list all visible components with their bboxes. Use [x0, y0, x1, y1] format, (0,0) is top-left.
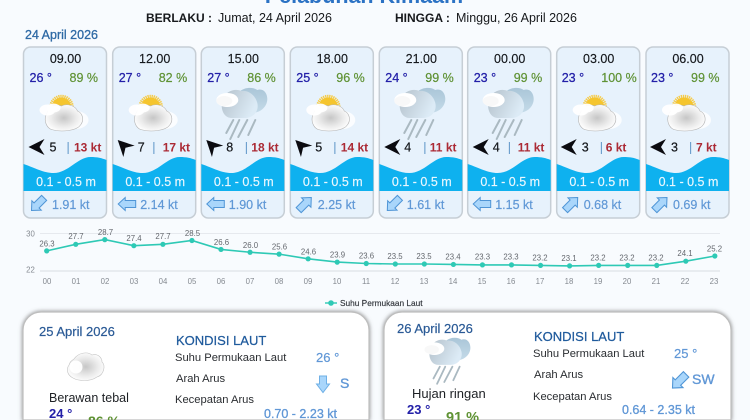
panel: forecast 09.00: 13 kt [74, 140, 101, 154]
panel: forecast 03.00: 3 [582, 140, 589, 154]
line chart: sea surface temperature: 26.6 [214, 238, 229, 247]
panel: forecast 03.00: 23 ° [562, 71, 584, 85]
panel: forecast 06.00: | [689, 140, 692, 154]
panel: forecast 09.00: 26 ° [30, 71, 52, 85]
line chart: sea surface temperature: 15 [478, 277, 487, 286]
panel: forecast 12.00: 27 ° [119, 71, 141, 85]
panel: forecast 00.00: 99 % [514, 71, 542, 85]
line chart: sea surface temperature: 02 [101, 277, 109, 286]
date heading: 24 April 2026 [25, 28, 98, 42]
panel: forecast 21.00 [379, 47, 462, 218]
panel: forecast 12.00 [112, 47, 196, 218]
panel: 26 April: 25 ° [674, 346, 697, 361]
panel: forecast 12.00: 17 kt [163, 140, 190, 154]
line chart: sea surface temperature: 25.2 [707, 244, 722, 254]
panel: forecast 18.00: 96 % [336, 71, 365, 85]
panel: forecast 06.00: 3 [671, 140, 678, 154]
line chart: sea surface temperature: 07 [246, 277, 254, 286]
line chart: sea surface temperature: 18 [565, 277, 573, 286]
line chart: sea surface temperature: 01 [72, 277, 80, 286]
line chart: sea surface temperature: 23.5 [387, 252, 403, 261]
line chart: sea surface temperature: 30 [26, 230, 35, 238]
chart legend: Suhu Permukaan Laut [340, 298, 423, 308]
panel: forecast 21.00: 4 [404, 140, 411, 154]
panel: forecast 18.00: 18.00 [317, 52, 348, 66]
line chart: sea surface temperature: 04 [159, 277, 168, 286]
line chart: sea surface temperature: 17 [536, 277, 544, 286]
panel: forecast 03.00: 6 kt [606, 140, 626, 154]
panel: forecast 15.00: 8 [226, 140, 233, 154]
panel: forecast 15.00: 1.90 kt [229, 198, 267, 212]
panel: forecast 12.00: 7 [138, 140, 145, 154]
panel: forecast 15.00: 15.00 [228, 52, 259, 66]
validity period [146, 11, 577, 25]
line chart: sea surface temperature: 27.7 [155, 232, 171, 241]
line chart: sea surface temperature: 23.4 [445, 252, 461, 262]
validity period: HINGGA : [395, 11, 450, 25]
line chart: sea surface temperature: 23.2 [648, 254, 664, 262]
panel: 26 April: 0.64 - 2.35 kt [622, 403, 695, 417]
panel: forecast 03.00: 0.1 - 0.5 m [569, 175, 629, 189]
panel: forecast 09.00: | [66, 140, 70, 154]
line chart: sea surface temperature: 27.4 [126, 234, 142, 243]
panel: 26 April: Kecepatan Arus [533, 391, 612, 403]
line chart: sea surface temperature: 23.2 [590, 254, 606, 262]
icon: light rain [424, 338, 470, 384]
line chart: sea surface temperature: 00 [43, 277, 52, 286]
line chart: sea surface temperature: 23.1 [561, 254, 577, 263]
panel: forecast 06.00: 99 % [691, 71, 720, 85]
line chart: sea surface temperature: 22 [26, 266, 35, 274]
icon: current arrow south-west [667, 369, 691, 393]
panel: forecast 12.00: 2.14 kt [140, 198, 178, 212]
line chart: sea surface temperature: 23.5 [416, 252, 432, 261]
panel: forecast 00.00: 1.15 kt [495, 198, 533, 212]
panel: 26 April [384, 312, 731, 420]
line chart: sea surface temperature: 19 [594, 277, 602, 286]
panel: forecast 03.00 [557, 47, 640, 218]
line chart: sea surface temperature: 22 [681, 277, 689, 286]
panel: forecast 18.00 [290, 47, 373, 218]
panel: 25 April: 25 April 2026 [39, 324, 115, 339]
line chart: sea surface temperature: 12 [391, 277, 399, 286]
panel: forecast 00.00: 23 ° [474, 71, 496, 85]
panel: forecast 06.00: 7 kt [696, 140, 717, 154]
panel: forecast 15.00 [201, 47, 284, 218]
panel: forecast 21.00: 0.1 - 0.5 m [392, 175, 452, 189]
line chart: sea surface temperature: 23.2 [532, 254, 548, 262]
panel: forecast 21.00: 99 % [425, 71, 454, 85]
panel: forecast 15.00: 27 ° [207, 71, 230, 85]
panel: forecast 15.00: | [245, 140, 248, 154]
line chart: sea surface temperature: 23.2 [619, 254, 635, 262]
panel: forecast 18.00: 5 [315, 140, 322, 154]
panel: forecast 06.00: 23 ° [651, 71, 673, 85]
panel: forecast 09.00 [24, 47, 106, 218]
line chart: sea surface temperature: 23 [710, 277, 718, 286]
panel: forecast 00.00: 4 [493, 140, 500, 154]
panel: forecast 21.00: | [423, 140, 427, 154]
panel: 25 April: Suhu Permukaan Laut [175, 352, 287, 364]
panel: forecast 15.00: 18 kt [251, 140, 279, 154]
panel: forecast 03.00: 100 % [601, 71, 637, 85]
panel: forecast 18.00: 25 ° [296, 71, 319, 85]
panel: forecast 03.00: 03.00 [583, 52, 614, 66]
panel: forecast 12.00: | [152, 140, 155, 154]
panel: forecast 06.00: 0.1 - 0.5 m [659, 175, 718, 189]
line chart: sea surface temperature: 23.9 [330, 250, 345, 260]
validity period: Minggu, 26 April 2026 [456, 11, 577, 25]
line chart: sea surface temperature: 26.0 [243, 241, 259, 250]
line chart: sea surface temperature: 03 [130, 277, 138, 286]
panel: forecast 18.00: | [333, 140, 337, 154]
panel: forecast 06.00 [646, 47, 729, 218]
panel: forecast 21.00: 1.61 kt [407, 198, 445, 212]
icon: current arrow south [316, 376, 330, 392]
panel: 25 April: Arah Arus [176, 373, 226, 385]
panel: 25 April: Kecepatan Arus [175, 394, 254, 406]
panel: forecast 21.00: 21.00 [406, 52, 437, 66]
line chart: sea surface temperature: 08 [275, 277, 283, 286]
validity period: BERLAKU : [146, 11, 212, 25]
panel: 25 April: S [340, 375, 349, 391]
panel: forecast 21.00: 11 kt [430, 140, 457, 154]
icon: thick cloud [67, 353, 104, 380]
panel: forecast 21.00: 24 ° [385, 71, 408, 85]
validity period: Jumat, 24 April 2026 [218, 11, 332, 25]
panel: forecast 18.00: 14 kt [341, 140, 368, 154]
line chart: sea surface temperature: 10 [333, 277, 342, 286]
line chart: sea surface temperature: 16 [507, 277, 515, 286]
line chart: sea surface temperature: 20 [623, 277, 632, 286]
panel: 25 April [23, 312, 369, 420]
panel: forecast 00.00: 0.1 - 0.5 m [480, 175, 540, 189]
panel: 26 April: Suhu Permukaan Laut [533, 348, 645, 360]
panel: forecast 00.00: 00.00 [494, 52, 525, 66]
line chart: sea surface temperature: 23.3 [475, 252, 490, 262]
panel: 26 April: 26 April 2026 [397, 321, 473, 336]
panel: forecast 09.00: 09.00 [50, 52, 81, 66]
panel: forecast 06.00: 0.69 kt [673, 198, 711, 212]
line chart: sea surface temperature: 06 [217, 277, 225, 286]
panel: forecast 03.00: | [600, 140, 603, 154]
line chart: sea surface temperature: 05 [188, 277, 197, 286]
panel: forecast 09.00: 0.1 - 0.5 m [36, 175, 96, 189]
panel: forecast 03.00: 0.68 kt [584, 198, 622, 212]
panel: 26 April: 23 ° [407, 402, 430, 417]
panel: forecast 06.00: 06.00 [672, 52, 704, 66]
panel: forecast 18.00: 2.25 kt [318, 198, 356, 212]
panel: forecast 00.00 [468, 47, 551, 218]
line chart: sea surface temperature: 14 [449, 277, 458, 286]
line chart: sea surface temperature: 21 [652, 277, 660, 286]
line chart: sea surface temperature: 28.5 [185, 229, 201, 238]
panel: forecast 18.00: 0.1 - 0.5 m [303, 175, 363, 189]
panel: forecast 15.00: 0.1 - 0.5 m [214, 175, 274, 189]
line chart: sea surface temperature: 28.7 [98, 228, 113, 237]
panel: 26 April: Arah Arus [534, 369, 584, 381]
line chart: sea surface temperature [26, 228, 722, 286]
panel: forecast 00.00: 11 kt [518, 140, 544, 154]
panel: forecast 12.00: 0.1 - 0.5 m [125, 175, 185, 189]
panel: forecast 15.00: 86 % [247, 71, 276, 85]
line chart: sea surface temperature: 23.6 [359, 252, 374, 260]
panel: forecast 12.00: 82 % [159, 71, 187, 85]
line chart: sea surface temperature: 09 [304, 277, 312, 286]
panel: forecast 09.00: 89 % [70, 71, 98, 85]
line chart: sea surface temperature: 11 [362, 277, 370, 286]
panel: forecast 09.00: 1.91 kt [52, 198, 90, 212]
line chart: sea surface temperature: 24.1 [677, 249, 693, 258]
panel: forecast 00.00: | [508, 140, 511, 154]
panel: 25 April: Berawan tebal [49, 391, 129, 405]
line chart: sea surface temperature: 26.3 [39, 240, 55, 248]
line chart: sea surface temperature: 25.6 [272, 242, 287, 252]
line chart: sea surface temperature: 24.6 [301, 248, 316, 256]
line chart: sea surface temperature: 27.7 [68, 232, 84, 241]
panel: forecast 12.00: 12.00 [139, 52, 170, 66]
panel: 25 April: KONDISI LAUT [176, 333, 266, 348]
panel: 26 April: KONDISI LAUT [534, 329, 624, 344]
line chart: sea surface temperature: 13 [420, 277, 428, 286]
panel: 26 April: SW [692, 371, 715, 387]
panel: 25 April: 26 ° [316, 350, 339, 365]
panel: forecast 09.00: 5 [50, 140, 56, 154]
panel: 26 April: Hujan ringan [412, 386, 486, 401]
line chart: sea surface temperature: 23.3 [503, 252, 519, 262]
